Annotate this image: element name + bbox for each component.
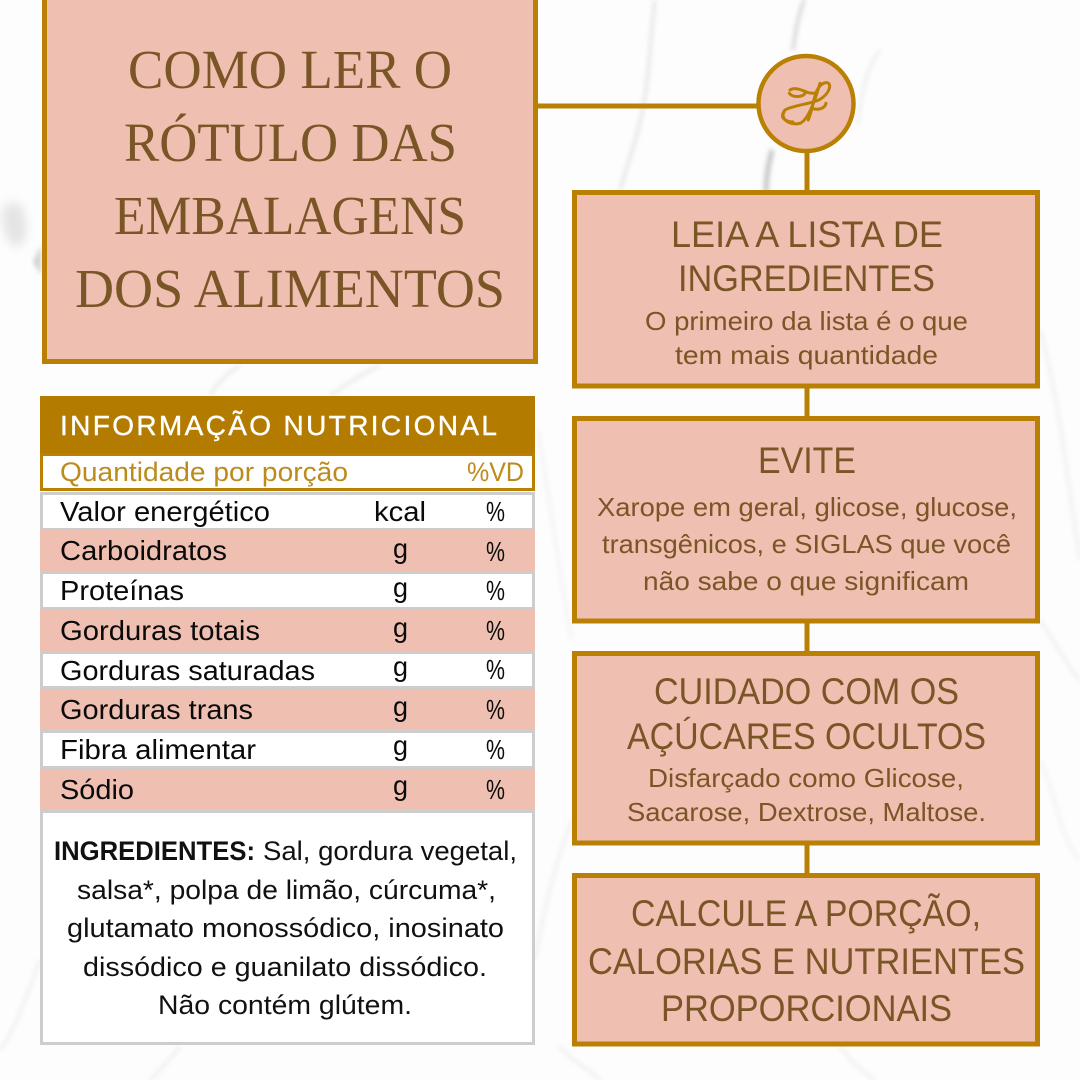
row: gorduras totais: % bbox=[486, 615, 505, 646]
table header bbox=[40, 396, 535, 454]
row: sódio: g bbox=[393, 770, 408, 801]
row: proteínas: Proteínas bbox=[60, 575, 184, 606]
row: fibra alimentar: Fibra alimentar bbox=[60, 734, 256, 765]
text block: O primeiro da lista é o que bbox=[645, 306, 968, 336]
heading: CALORIAS E NUTRIENTES bbox=[588, 941, 1025, 982]
panel: title bbox=[44, 0, 536, 362]
row: gorduras trans: % bbox=[486, 694, 505, 725]
heading: PROPORCIONAIS bbox=[661, 988, 952, 1029]
row: gorduras totais: Gorduras totais bbox=[60, 615, 260, 646]
row: gorduras saturadas: % bbox=[486, 654, 505, 685]
row: fibra alimentar: g bbox=[393, 730, 408, 761]
heading: LEIA A LISTA DE bbox=[671, 214, 943, 255]
ingredients text block: Não contém glútem. bbox=[158, 990, 412, 1020]
title: COMO LER O bbox=[128, 39, 452, 100]
text block: Disfarçado como Glicose, bbox=[648, 763, 964, 793]
ingredients text block: Sal, gordura vegetal, bbox=[263, 836, 517, 866]
row: proteínas bbox=[42, 572, 534, 608]
title: EMBALAGENS bbox=[114, 185, 466, 246]
panel: evite bbox=[574, 418, 1038, 621]
row: gorduras saturadas: Gorduras saturadas bbox=[60, 655, 315, 686]
row: fibra alimentar: % bbox=[486, 734, 505, 765]
table subheader: Quantidade por porção bbox=[60, 457, 348, 487]
row: gorduras trans bbox=[40, 689, 535, 730]
table subheader: %VD bbox=[467, 457, 524, 487]
table subheader bbox=[42, 454, 534, 490]
table header: INFORMAÇÃO NUTRICIONAL bbox=[60, 410, 497, 441]
row: valor energético: % bbox=[486, 496, 505, 527]
row: gorduras totais bbox=[40, 610, 535, 651]
row: carboidratos bbox=[40, 530, 535, 571]
text block: Xarope em geral, glicose, glucose, bbox=[597, 492, 1017, 522]
panel: nutrition table bbox=[40, 396, 535, 1044]
row: proteínas: % bbox=[486, 575, 505, 606]
ingredients text block: INGREDIENTES: bbox=[54, 836, 255, 866]
ingredients text block: dissódico e guanilato dissódico. bbox=[83, 952, 487, 982]
row: gorduras saturadas bbox=[42, 651, 534, 688]
heading: AÇÚCARES OCULTOS bbox=[627, 716, 986, 757]
row: fibra alimentar bbox=[42, 730, 534, 768]
row: valor energético bbox=[42, 494, 534, 530]
panel: leia a lista de ingredientes bbox=[574, 192, 1038, 386]
panel: cuidado com os açúcares ocultos bbox=[574, 654, 1038, 843]
row: valor energético: kcal bbox=[374, 496, 426, 527]
row: valor energético: Valor energético bbox=[60, 496, 270, 527]
title: DOS ALIMENTOS bbox=[75, 258, 505, 319]
text block: tem mais quantidade bbox=[675, 340, 938, 370]
ingredients text block: salsa*, polpa de limão, cúrcuma*, bbox=[77, 875, 496, 905]
heading: CUIDADO COM OS bbox=[654, 671, 959, 712]
row: sódio bbox=[40, 769, 535, 810]
row: gorduras totais: g bbox=[393, 612, 408, 643]
row: gorduras trans: g bbox=[393, 691, 408, 722]
heading: CALCULE A PORÇÃO, bbox=[631, 893, 981, 934]
row: carboidratos: g bbox=[393, 533, 408, 564]
title bbox=[75, 39, 505, 319]
heading: INGREDIENTES bbox=[678, 258, 935, 299]
connector lines bbox=[538, 106, 807, 875]
ingredients text block: glutamato monossódico, inosinato bbox=[67, 913, 504, 943]
row: sódio: Sódio bbox=[60, 774, 134, 805]
heading: EVITE bbox=[758, 440, 856, 481]
title: RÓTULO DAS bbox=[124, 112, 457, 173]
row: gorduras trans: Gorduras trans bbox=[60, 694, 253, 725]
row: gorduras saturadas: g bbox=[393, 651, 408, 682]
text block: Sacarose, Dextrose, Maltose. bbox=[627, 797, 986, 827]
ingredients text block bbox=[42, 812, 534, 1044]
text block: não sabe o que significam bbox=[643, 566, 969, 596]
row: carboidratos: Carboidratos bbox=[60, 535, 227, 566]
text block: transgênicos, e SIGLAS que você bbox=[602, 529, 1011, 559]
row: proteínas: g bbox=[393, 572, 408, 603]
row: sódio: % bbox=[486, 774, 505, 805]
row: carboidratos: % bbox=[486, 536, 505, 567]
icon: monogram badge bbox=[758, 56, 854, 151]
panel: calcule a porção bbox=[574, 876, 1038, 1044]
